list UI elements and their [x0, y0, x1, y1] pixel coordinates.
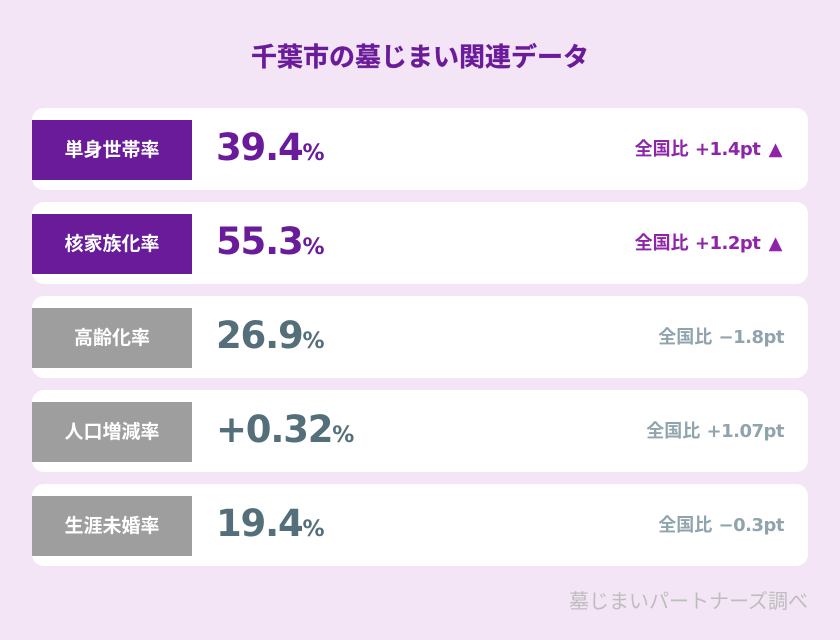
panel: 生涯未婚率	[32, 484, 808, 566]
value: 39.4%: 39.4%	[216, 126, 325, 169]
label: 単身世帯率	[32, 120, 192, 180]
value: 55.3%: 55.3%	[216, 220, 325, 263]
comparison: +1.07pt: 全国比 +1.07pt	[646, 421, 784, 442]
value: 26.9%: 26.9%	[216, 314, 325, 357]
label: 単身世帯率: 単身世帯率	[64, 139, 160, 161]
value: +0.32%: +0.32%	[216, 408, 354, 451]
comparison: +1.4pt: 全国比 +1.4pt ▲	[635, 139, 782, 160]
panel: 高齢化率	[32, 296, 808, 378]
panel: 核家族化率	[32, 202, 808, 284]
label: 核家族化率: 核家族化率	[64, 233, 160, 255]
panel: 単身世帯率	[32, 108, 808, 190]
comparison: -0.3pt: 全国比 −0.3pt	[658, 515, 784, 536]
label: 生涯未婚率: 生涯未婚率	[64, 515, 160, 537]
value: 19.4%: 19.4%	[216, 502, 325, 545]
comparison: +1.2pt: 全国比 +1.2pt ▲	[635, 233, 782, 254]
label: 生涯未婚率	[32, 496, 192, 556]
label: 人口増減率: 人口増減率	[64, 421, 160, 443]
comparison: -1.8pt: 全国比 −1.8pt	[658, 327, 784, 348]
label: 高齢化率	[32, 308, 192, 368]
panel: 人口増減率	[32, 390, 808, 472]
label: 核家族化率	[32, 214, 192, 274]
label: 人口増減率	[32, 402, 192, 462]
title: 千葉市の墓じまい関連データ	[251, 43, 589, 73]
label: 高齢化率: 高齢化率	[74, 327, 150, 349]
source note: 墓じまいパートナーズ調べ	[569, 589, 808, 613]
